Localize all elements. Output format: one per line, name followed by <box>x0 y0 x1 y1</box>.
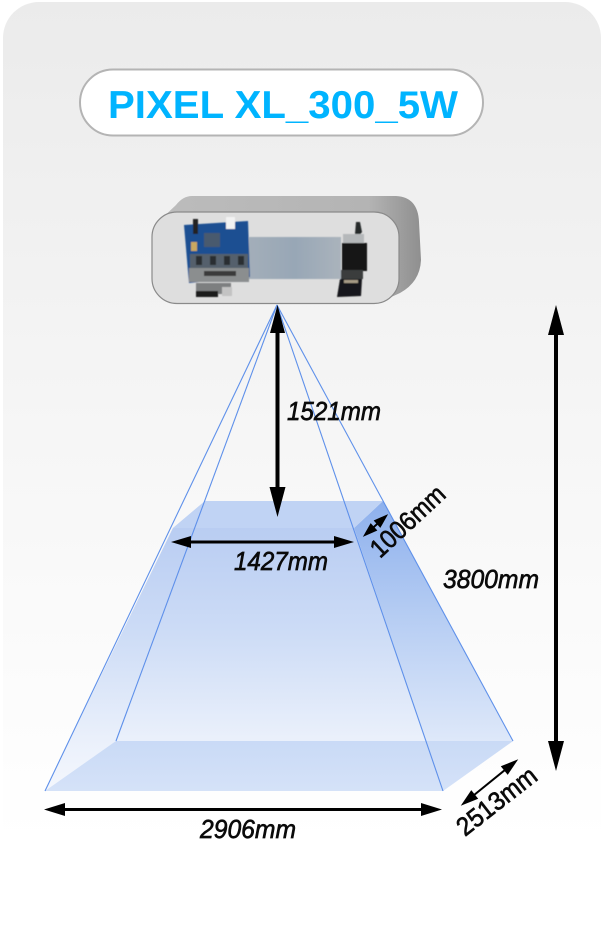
arrow: 1006mm depth <box>360 510 391 541</box>
arrow: 1521mm height <box>270 305 286 517</box>
housing back <box>158 196 421 303</box>
label: 3800mm: 3800mm <box>443 564 539 594</box>
arrow: 2513mm depth <box>457 755 522 810</box>
title pill: PIXEL XL_300_5W <box>108 84 458 127</box>
internals <box>184 217 367 297</box>
device housing with internals <box>152 196 421 304</box>
right face <box>354 501 513 791</box>
arrow: 2906mm width <box>44 803 442 816</box>
light cone pyramid <box>45 305 513 791</box>
control board <box>184 221 250 283</box>
camera <box>355 222 362 236</box>
label: 1427mm: 1427mm <box>234 546 328 576</box>
front face <box>45 528 443 791</box>
label: 2513mm: 2513mm <box>450 760 543 842</box>
label: 2906mm: 2906mm <box>199 814 296 844</box>
label: 1521mm: 1521mm <box>287 396 381 426</box>
beam edges <box>45 305 513 791</box>
left face <box>45 501 205 791</box>
upper plane <box>173 501 383 528</box>
ribbon cable <box>249 237 341 279</box>
arrow: 3800mm height <box>548 305 564 771</box>
arrow: 1427mm width <box>171 536 354 548</box>
label: 1006mm: 1006mm <box>364 479 451 563</box>
title pill <box>80 70 483 136</box>
floor plane <box>45 741 513 791</box>
housing front <box>152 212 399 304</box>
